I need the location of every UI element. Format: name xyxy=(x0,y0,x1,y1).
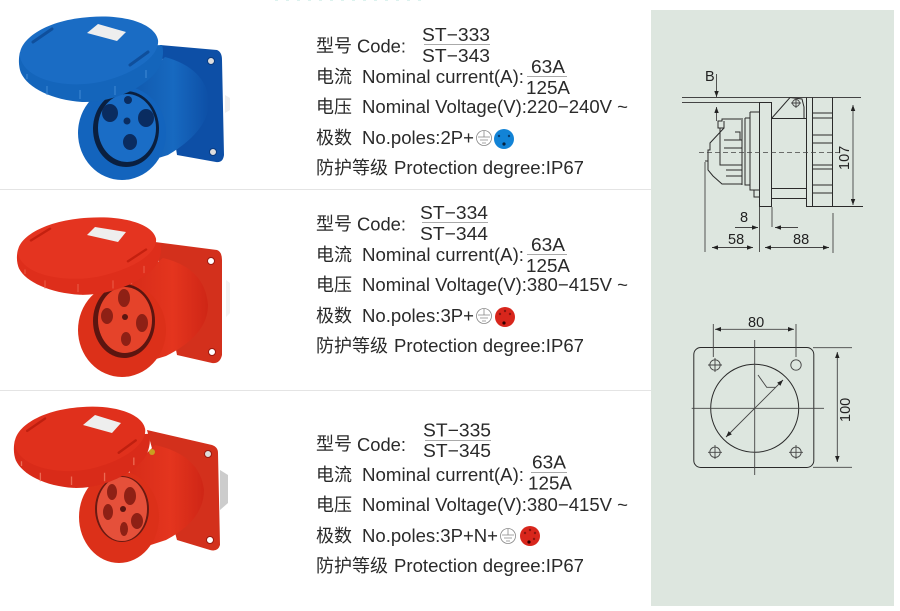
spec text: ST-335: 防护等级 xyxy=(316,556,388,576)
product photo: red socket 3P xyxy=(17,217,230,377)
spec text: ST-335: ST−345 xyxy=(423,440,491,461)
spec text: ST-333: 125A xyxy=(526,77,571,98)
spec text: ST-335: Nominal current(A): xyxy=(362,464,524,485)
spec text: ST-333 xyxy=(316,24,628,178)
icon: earth symbol xyxy=(476,308,492,324)
spec text: ST-335: Code: xyxy=(357,434,406,455)
spec text: ST-335: ST−335 xyxy=(423,420,491,440)
spec text: ST-333: Nominal Voltage(V):220−240V ~ xyxy=(362,96,628,117)
spec text: ST-334: 电压 xyxy=(316,275,352,295)
spec text: ST-335: No.poles:3P+N+ xyxy=(362,525,498,546)
spec text: ST-334: 防护等级 xyxy=(316,336,388,356)
spec text: ST-334: 极数 xyxy=(316,306,352,326)
spec text: ST-334: 型号 xyxy=(316,214,352,234)
spec text: ST-334: 63A xyxy=(531,234,566,255)
spec text: ST-334: ST−344 xyxy=(420,223,488,244)
icon: earth symbol xyxy=(500,528,516,544)
spec text: ST-333: ST−333 xyxy=(422,24,490,45)
spec text: ST-335: 63A xyxy=(532,452,567,472)
side view drawing xyxy=(682,69,863,253)
spec text: ST-334: 电流 xyxy=(316,245,352,265)
side view drawing: 58 xyxy=(728,232,744,248)
spec text: ST-335: 125A xyxy=(528,472,573,494)
spec text: ST-335 xyxy=(316,420,628,576)
spec text: ST-333: Protection degree:IP67 xyxy=(394,157,584,178)
spec text: ST-335: 型号 xyxy=(316,434,352,454)
spec text: ST-335: 电流 xyxy=(316,465,352,485)
spec text: ST-334: Protection degree:IP67 xyxy=(394,335,584,356)
spec text: ST-333: 型号 xyxy=(316,36,352,56)
spec text: ST-335: Nominal Voltage(V):380−415V ~ xyxy=(362,494,628,515)
spec text: ST-334: Nominal current(A): xyxy=(362,244,524,265)
spec text: ST-333: 63A xyxy=(531,56,566,77)
spec text: ST-333: Code: xyxy=(357,36,406,56)
spec text: ST-335: 电压 xyxy=(316,495,352,515)
icon: red pole face xyxy=(495,307,515,327)
spec text: ST-333: 电流 xyxy=(316,67,352,87)
side view drawing: 8 xyxy=(740,210,748,226)
cropped heading remnant xyxy=(275,0,425,2)
product photo: blue socket xyxy=(19,16,230,180)
spec text: ST-334: No.poles:3P+ xyxy=(362,305,474,326)
spec text: ST-335: Protection degree:IP67 xyxy=(394,555,584,576)
icon: earth symbol xyxy=(476,130,492,146)
icon: red pole face xyxy=(520,526,540,546)
product photo: red socket 3P+N xyxy=(14,407,228,563)
spec text: ST-333: 防护等级 xyxy=(316,158,388,178)
front view drawing xyxy=(692,315,854,475)
spec text: ST-334: Code: xyxy=(357,214,406,234)
spec text: ST-334: Nominal Voltage(V):380−415V ~ xyxy=(362,274,628,295)
spec text: ST-334: 125A xyxy=(526,255,571,276)
spec text: ST-333: 极数 xyxy=(316,128,352,148)
spec text: ST-335: 极数 xyxy=(316,526,352,546)
side view drawing: B xyxy=(705,69,715,85)
icon: blue pole face xyxy=(494,129,514,149)
side view drawing: 88 xyxy=(793,232,809,248)
spec text: ST-334: ST−334 xyxy=(420,202,488,223)
side view drawing: 107 xyxy=(837,146,853,170)
spec text: ST-333: 电压 xyxy=(316,97,352,117)
front view drawing: 100 xyxy=(838,398,854,422)
spec text: ST-333: ST−343 xyxy=(422,45,490,66)
spec text: ST-333: No.poles:2P+ xyxy=(362,127,474,148)
spec text: ST-333: Nominal current(A): xyxy=(362,66,524,87)
front view drawing: 80 xyxy=(748,315,764,331)
panel: drawings background xyxy=(651,10,894,606)
spec text: ST-334 xyxy=(316,202,628,356)
